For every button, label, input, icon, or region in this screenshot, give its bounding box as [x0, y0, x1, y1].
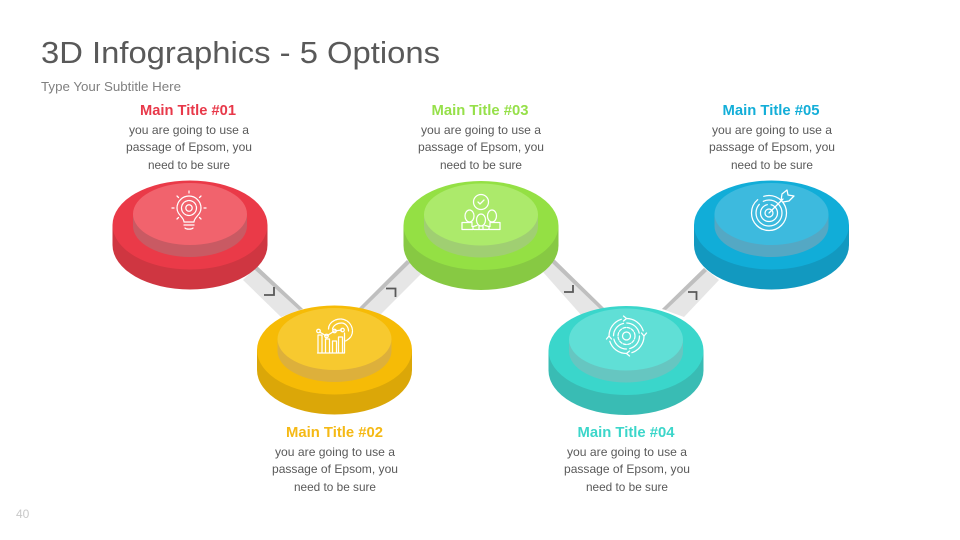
- text block: option 4: you are going to use a: [567, 445, 687, 459]
- text block: option 3: [418, 102, 544, 172]
- subtitle: Type Your Subtitle Here: [41, 79, 181, 94]
- text block: option 3: need to be sure: [440, 158, 522, 172]
- text block: option 2: need to be sure: [294, 480, 376, 494]
- text block: option 3: Main Title #03: [432, 102, 528, 119]
- title: 3D Infographics - 5 Options: [41, 35, 440, 70]
- icon: bar chart with gear: [317, 319, 352, 353]
- connector: option 1 to 2: [243, 266, 303, 317]
- text block: option 5: you are going to use a: [712, 123, 832, 137]
- icon: target with arrow: [752, 190, 794, 230]
- disc: option 1 red: [112, 180, 268, 290]
- text block: option 2: [272, 424, 398, 494]
- page number: 40: [16, 507, 30, 521]
- text block: option 5: passage of Epsom, you: [709, 140, 835, 154]
- connector: option 4 to 5: [662, 268, 719, 317]
- text block: option 4: need to be sure: [586, 480, 668, 494]
- text block: option 5: [709, 102, 835, 172]
- disc: option 4 teal: [548, 306, 704, 415]
- text block: option 1: Main Title #01: [140, 102, 236, 119]
- icon: team with check mark: [462, 194, 500, 230]
- text block: option 1: passage of Epsom, you: [126, 140, 252, 154]
- text block: option 1: you are going to use a: [129, 123, 249, 137]
- connector: option 3 to 4: [543, 259, 604, 316]
- disc: option 3 green: [404, 181, 558, 290]
- disc: option 5 blue: [694, 180, 849, 290]
- text block: option 5: need to be sure: [731, 158, 813, 172]
- text block: option 1: [126, 102, 252, 172]
- icon: gear with cycle arrows: [606, 316, 646, 356]
- connector: option 2 to 3: [359, 260, 421, 315]
- text block: option 2: you are going to use a: [275, 445, 395, 459]
- text block: option 3: you are going to use a: [421, 123, 541, 137]
- text block: option 3: passage of Epsom, you: [418, 140, 544, 154]
- disc: option 2 yellow: [257, 306, 412, 414]
- text block: option 1: need to be sure: [148, 158, 230, 172]
- text block: option 2: passage of Epsom, you: [272, 462, 398, 476]
- text block: option 4: [564, 424, 690, 494]
- text block: option 4: Main Title #04: [578, 424, 675, 441]
- text block: option 2: Main Title #02: [286, 424, 383, 441]
- icon: light bulb with gear: [172, 191, 206, 229]
- text block: option 5: Main Title #05: [722, 102, 820, 119]
- text block: option 4: passage of Epsom, you: [564, 462, 690, 476]
